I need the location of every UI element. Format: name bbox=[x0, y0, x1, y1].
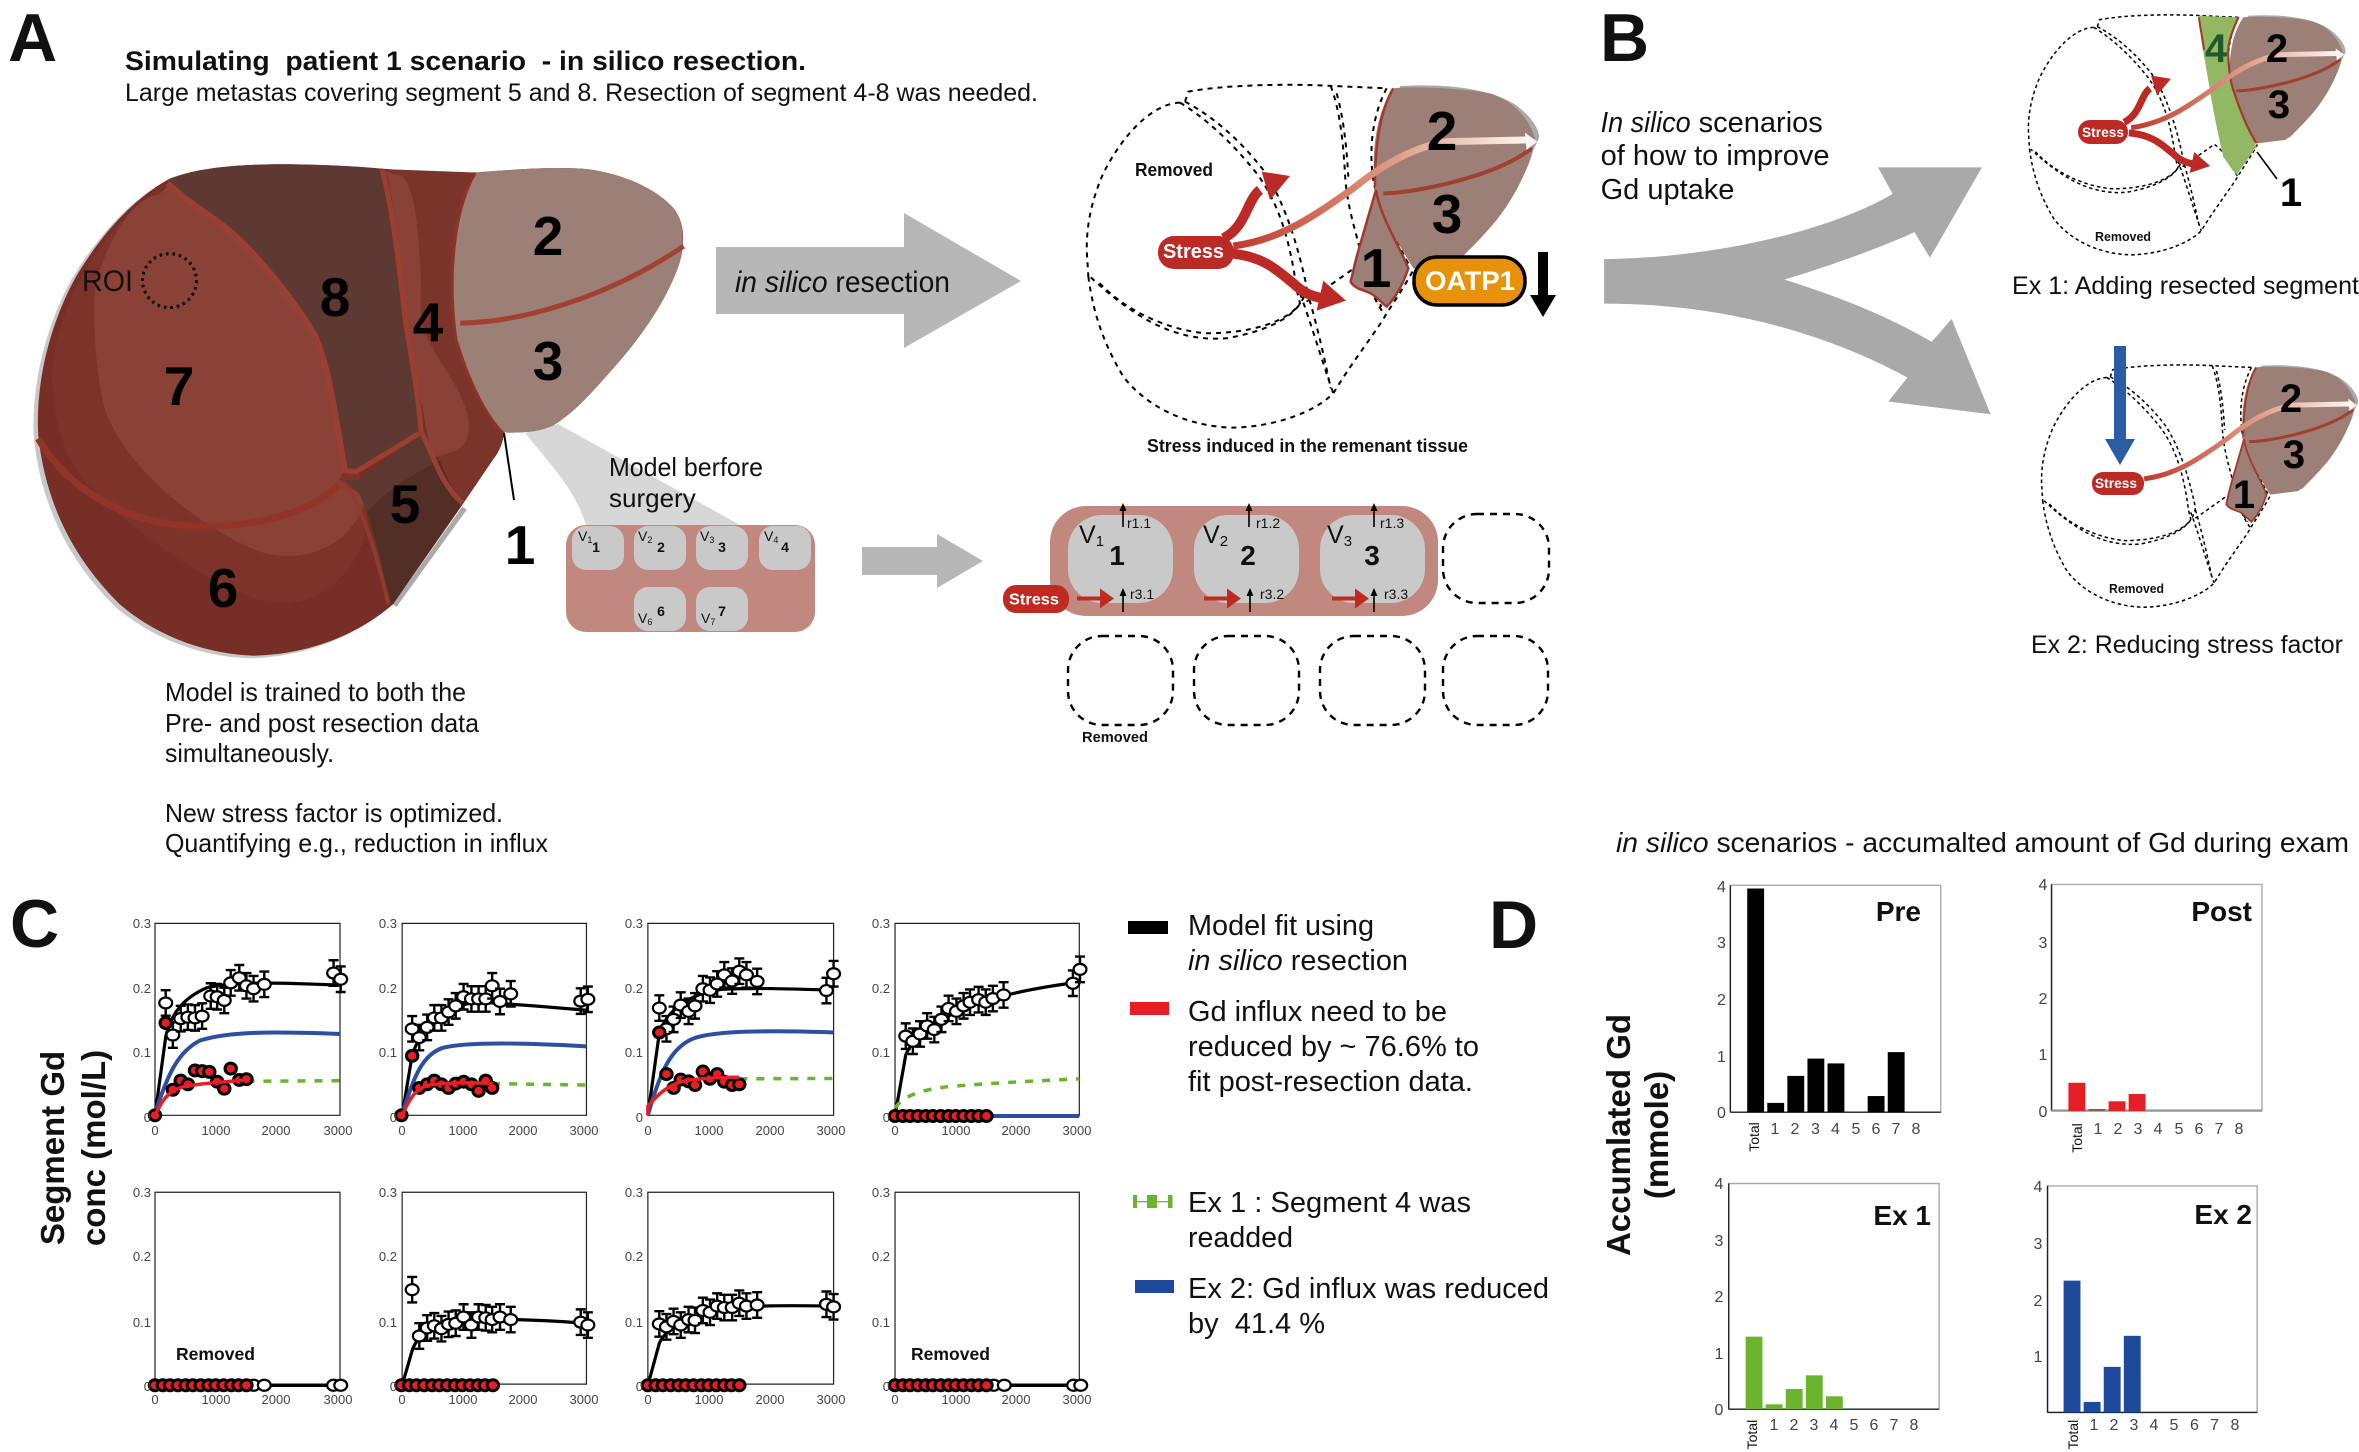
chart tick labels: 0.2 bbox=[872, 1249, 890, 1264]
arrow: in silico resection bbox=[716, 213, 1021, 348]
chart tick labels: 2000 bbox=[509, 1123, 537, 1138]
chart tick labels: 1000 bbox=[449, 1123, 477, 1138]
chart tick labels: 0.3 bbox=[872, 916, 890, 931]
example 2 schematic: Stress bbox=[2095, 475, 2137, 491]
legend: Ex 1: readded bbox=[1188, 1222, 1293, 1254]
chart tick labels: 0 bbox=[636, 1379, 643, 1394]
chart tick labels: 3000 bbox=[817, 1123, 845, 1138]
bar chart: Ex 1: 2 bbox=[1715, 1289, 1724, 1306]
training description text: New stress factor is optimized. bbox=[165, 798, 503, 828]
bar chart: Pre: 5 bbox=[1852, 1121, 1861, 1138]
training description text: Quantifying e.g., reduction in influx bbox=[165, 828, 548, 858]
model before surgery compartments: 7 bbox=[718, 603, 726, 619]
bar chart: Post: 4 bbox=[2154, 1121, 2163, 1138]
post-surgery compartment model: V bbox=[1327, 521, 1344, 549]
bar chart: Ex 2: 3 bbox=[2034, 1236, 2043, 1253]
bar chart: Ex 1: 3 bbox=[1715, 1233, 1724, 1250]
bar chart: Post: Total bbox=[2069, 1123, 2085, 1153]
chart 2 series bbox=[396, 973, 594, 1121]
chart tick labels: 0 bbox=[398, 1123, 406, 1138]
example 2 caption: Ex 2: Reducing stress factor bbox=[2031, 631, 2343, 659]
chart tick labels: 0.2 bbox=[133, 981, 151, 996]
chart 4 series bbox=[889, 957, 1086, 1121]
bar chart: Ex 2: 6 bbox=[2190, 1417, 2199, 1434]
bar chart: Post: 1 bbox=[2094, 1121, 2103, 1138]
panel C label: C bbox=[10, 886, 59, 962]
chart tick labels: 2000 bbox=[1002, 1123, 1030, 1138]
chart tick labels: 0.1 bbox=[625, 1045, 643, 1060]
leader line to segment 1 bbox=[504, 433, 514, 500]
panel B intro text: In silico scenarios bbox=[1601, 107, 1823, 139]
chart 1 series bbox=[149, 960, 347, 1121]
panel B intro text: Gd uptake bbox=[1601, 174, 1734, 206]
bar chart: Post: 2 bbox=[2039, 991, 2048, 1008]
subtitle: Large metastas covering segment 5 and 8. Resection of segment 4-8 was needed. bbox=[125, 79, 1038, 107]
chart tick labels: 3000 bbox=[324, 1392, 352, 1407]
bar chart: Post: 2 bbox=[2114, 1121, 2123, 1138]
chart 8 series bbox=[889, 1380, 1087, 1391]
y axis label D: Accumlated Gd bbox=[1600, 1014, 1637, 1256]
chart tick labels: 1000 bbox=[942, 1123, 970, 1138]
arrow: OATP1 decrease bbox=[1530, 252, 1556, 317]
title: Simulating patient 1 scenario - in silico resection. bbox=[125, 46, 806, 76]
funnel from liver to model box bbox=[525, 424, 740, 525]
chart tick labels: 0.2 bbox=[379, 1249, 397, 1264]
bar chart: Ex 1: 1 bbox=[1770, 1417, 1779, 1434]
bar chart: Pre: 8 bbox=[1912, 1121, 1921, 1138]
bar chart: Post: Post bbox=[2191, 896, 2252, 927]
bar chart: Ex 2: Ex 2 bbox=[2194, 1199, 2252, 1230]
chart tick labels: 0.3 bbox=[625, 916, 643, 931]
chart tick labels: 0 bbox=[390, 1379, 397, 1394]
bar chart: Pre bbox=[1717, 879, 1941, 1152]
training description text: Pre- and post resection data bbox=[165, 708, 480, 738]
post-surgery compartment model: 2 bbox=[1220, 533, 1228, 550]
example 2 schematic: 3 bbox=[2283, 433, 2305, 477]
bar chart: Post: 5 bbox=[2175, 1121, 2184, 1138]
chart tick labels: 3000 bbox=[570, 1392, 598, 1407]
chart tick labels: 0.3 bbox=[133, 916, 151, 931]
bar chart: Pre: 4 bbox=[1831, 1121, 1840, 1138]
model before surgery compartments: 3 bbox=[718, 539, 726, 555]
legend: Ex 2: by 41.4 % bbox=[1188, 1308, 1325, 1340]
chart tick labels: 0.2 bbox=[379, 981, 397, 996]
bar chart: Ex 2: 8 bbox=[2231, 1417, 2240, 1434]
stress schematic after resection: 3 bbox=[1432, 183, 1462, 245]
bar chart: Ex 1: 5 bbox=[1850, 1417, 1859, 1434]
removed labels: Removed bbox=[911, 1344, 990, 1364]
model before surgery compartments: 6 bbox=[657, 603, 665, 619]
bar chart: Ex 2: 2 bbox=[2110, 1417, 2119, 1434]
bar chart: Ex 2 bbox=[2034, 1179, 2257, 1449]
bar chart: Post bbox=[2039, 877, 2262, 1153]
stress schematic after resection: 1 bbox=[1361, 237, 1391, 299]
model before surgery compartments bbox=[566, 525, 815, 632]
chart tick labels: 0 bbox=[644, 1392, 652, 1407]
chart tick labels: 0 bbox=[390, 1110, 397, 1125]
model before surgery label: Model berfore bbox=[609, 452, 763, 482]
bar chart: Ex 1: Ex 1 bbox=[1873, 1200, 1931, 1231]
chart tick labels: 0.1 bbox=[872, 1045, 890, 1060]
arrow to post-surgery model bbox=[862, 534, 983, 588]
bar chart: Ex 1: 0 bbox=[1715, 1402, 1724, 1419]
chart tick labels: 0.2 bbox=[625, 981, 643, 996]
training description text: simultaneously. bbox=[165, 738, 334, 768]
panel A label: A bbox=[8, 0, 57, 76]
example 1 schematic: 3 bbox=[2268, 83, 2290, 127]
bar chart: Ex 2: 2 bbox=[2034, 1293, 2043, 1310]
chart tick labels: 0 bbox=[636, 1110, 643, 1125]
post-surgery compartment model: V bbox=[1079, 521, 1096, 549]
bar chart: Ex 1 bbox=[1715, 1176, 1939, 1449]
ROI label and dotted circle: ROI bbox=[82, 265, 133, 298]
y axis label C: Segment Gd bbox=[34, 1051, 71, 1245]
chart tick labels: 0 bbox=[144, 1110, 151, 1125]
chart 6 series bbox=[396, 1277, 594, 1391]
post-surgery compartment model: 1 bbox=[1096, 533, 1104, 550]
bar chart: Post: 3 bbox=[2134, 1121, 2143, 1138]
post-surgery compartment model: r1.2 bbox=[1256, 515, 1280, 531]
chart tick labels: 0.3 bbox=[379, 916, 397, 931]
model before surgery compartments: 1 bbox=[592, 539, 600, 555]
chart tick labels: 0 bbox=[891, 1123, 899, 1138]
example 1 schematic: 2 bbox=[2266, 27, 2288, 71]
chart tick labels: 3000 bbox=[570, 1123, 598, 1138]
post-surgery compartment model: Removed bbox=[1082, 729, 1148, 746]
y axis label D: (mmole) bbox=[1638, 1071, 1675, 1199]
model before surgery compartments: 4 bbox=[781, 539, 789, 555]
example 1 schematic: 4 bbox=[2205, 27, 2228, 71]
liver segment numbers: 5 bbox=[390, 473, 420, 535]
model before surgery compartments: V bbox=[578, 528, 587, 544]
bar chart: Ex 2: Total bbox=[2065, 1420, 2081, 1449]
bar chart: Pre: 4 bbox=[1717, 879, 1726, 896]
panel B label: B bbox=[1600, 0, 1649, 76]
ROI label and dotted circle bbox=[82, 254, 196, 308]
post-surgery compartment model: 2 bbox=[1240, 540, 1256, 571]
bar chart: Ex 1: 8 bbox=[1910, 1417, 1919, 1434]
chart tick labels: 0 bbox=[398, 1392, 406, 1407]
training description text: Model is trained to both the bbox=[165, 677, 466, 707]
chart tick labels: 0.3 bbox=[379, 1185, 397, 1200]
stress schematic after resection: Removed bbox=[1135, 160, 1213, 180]
chart tick labels: 3000 bbox=[324, 1123, 352, 1138]
example 1 schematic: 1 bbox=[2280, 171, 2302, 215]
chart tick labels: 1000 bbox=[942, 1392, 970, 1407]
liver segment numbers: 6 bbox=[208, 557, 238, 619]
chart tick labels: 0 bbox=[891, 1392, 899, 1407]
panel D header: in silico scenarios - accumalted amount of Gd during exam bbox=[1616, 827, 2349, 858]
legend: influx reduction bbox=[1130, 996, 1479, 1098]
chart tick labels: 2000 bbox=[262, 1392, 290, 1407]
stress schematic after resection: 2 bbox=[1427, 100, 1457, 162]
model before surgery compartments: 7 bbox=[710, 617, 715, 627]
legend bbox=[1128, 910, 1549, 1340]
example 2 schematic: 2 bbox=[2280, 377, 2302, 421]
chart tick labels: 2000 bbox=[509, 1392, 537, 1407]
OATP1 badge bbox=[1414, 257, 1525, 305]
chart tick labels: 2000 bbox=[756, 1123, 784, 1138]
bar chart: Ex 1: 7 bbox=[1890, 1417, 1899, 1434]
chart tick labels: 0.1 bbox=[872, 1315, 890, 1330]
post-surgery compartment model: r3.3 bbox=[1384, 586, 1408, 602]
chart tick labels: 1000 bbox=[202, 1123, 230, 1138]
bar chart: Ex 1: 6 bbox=[1870, 1417, 1879, 1434]
chart tick labels: 0 bbox=[151, 1392, 159, 1407]
chart tick labels bbox=[133, 916, 1091, 1407]
chart tick labels: 0.3 bbox=[625, 1185, 643, 1200]
legend: Ex 2 bbox=[1135, 1273, 1549, 1340]
chart tick labels: 1000 bbox=[449, 1392, 477, 1407]
chart tick labels: 3000 bbox=[1063, 1392, 1091, 1407]
bar chart: Pre: 3 bbox=[1811, 1121, 1820, 1138]
chart tick labels: 1000 bbox=[695, 1123, 723, 1138]
bar chart: Post: 3 bbox=[2039, 935, 2048, 952]
chart tick labels: 2000 bbox=[262, 1123, 290, 1138]
bar chart: Ex 1: 3 bbox=[1810, 1417, 1819, 1434]
post-surgery compartment model: 3 bbox=[1364, 540, 1380, 571]
legend: model fit bbox=[1128, 910, 1408, 977]
bar chart: Pre: 0 bbox=[1717, 1105, 1726, 1122]
legend: influx reduction: fit post-resection data. bbox=[1188, 1066, 1473, 1098]
model before surgery compartments: 2 bbox=[647, 535, 652, 545]
chart frames bbox=[155, 923, 1079, 1384]
bar chart: Pre: 1 bbox=[1771, 1121, 1780, 1138]
bar chart: Post: 1 bbox=[2039, 1047, 2048, 1064]
liver segment numbers: 7 bbox=[164, 355, 194, 417]
legend: model fit: in silico resection bbox=[1188, 945, 1408, 977]
example 2 schematic: 1 bbox=[2233, 473, 2255, 517]
example 1 caption: Ex 1: Adding resected segment bbox=[2012, 272, 2359, 300]
bar chart: Ex 2: 1 bbox=[2034, 1349, 2043, 1366]
chart tick labels: 0 bbox=[883, 1110, 890, 1125]
example 2 schematic bbox=[2042, 365, 2358, 607]
model before surgery label: surgery bbox=[609, 483, 696, 513]
post-surgery compartment model: r3.1 bbox=[1130, 586, 1154, 602]
bar chart: Post: 0 bbox=[2039, 1104, 2048, 1121]
bar chart: Post: 7 bbox=[2215, 1121, 2224, 1138]
chart 3 series bbox=[648, 958, 840, 1115]
model before surgery compartments: V bbox=[701, 610, 710, 626]
chart 7 series bbox=[642, 1290, 840, 1391]
chart tick labels: 0.1 bbox=[379, 1045, 397, 1060]
example 1 schematic: Removed bbox=[2095, 230, 2151, 244]
post-surgery compartment model: r3.2 bbox=[1260, 586, 1284, 602]
chart tick labels: 0 bbox=[644, 1123, 652, 1138]
removed labels bbox=[176, 1344, 990, 1364]
panel B intro text: of how to improve bbox=[1601, 140, 1829, 172]
bar chart: Pre: Pre bbox=[1876, 896, 1921, 927]
bar chart: Pre: 6 bbox=[1872, 1121, 1881, 1138]
liver illustration bbox=[33, 164, 684, 658]
OATP1 badge: OATP1 bbox=[1425, 266, 1515, 296]
bar chart: Ex 1: 2 bbox=[1790, 1417, 1799, 1434]
chart tick labels: 0.3 bbox=[872, 1185, 890, 1200]
chart tick labels: 3000 bbox=[1063, 1123, 1091, 1138]
chart tick labels: 3000 bbox=[817, 1392, 845, 1407]
bar chart: Post: 8 bbox=[2235, 1121, 2244, 1138]
chart tick labels: 0.1 bbox=[133, 1315, 151, 1330]
model before surgery compartments: 1 bbox=[587, 535, 592, 545]
bar chart: Ex 2: 1 bbox=[2090, 1417, 2099, 1434]
post-surgery compartment model bbox=[1003, 503, 1549, 746]
model before surgery compartments: V bbox=[700, 528, 709, 544]
liver segment numbers: 2 bbox=[533, 205, 563, 267]
stress schematic after resection bbox=[1087, 85, 1539, 456]
bar chart: Pre: Total bbox=[1746, 1122, 1762, 1152]
model before surgery compartments: V bbox=[764, 528, 773, 544]
chart tick labels: 0.2 bbox=[133, 1249, 151, 1264]
example 1 schematic: Stress bbox=[2082, 124, 2124, 140]
chart tick labels: 1000 bbox=[202, 1392, 230, 1407]
splitting arrow bbox=[1604, 167, 1991, 414]
bar chart: Post: 6 bbox=[2195, 1121, 2204, 1138]
bar chart: Ex 2: 4 bbox=[2034, 1179, 2043, 1196]
y axis label C: conc (mol/L) bbox=[75, 1050, 112, 1246]
bar chart: Ex 2: 3 bbox=[2130, 1417, 2139, 1434]
panel D label: D bbox=[1489, 887, 1538, 963]
legend: Ex 1 bbox=[1133, 1187, 1471, 1254]
chart tick labels: 0.2 bbox=[872, 981, 890, 996]
post-surgery compartment model: 1 bbox=[1109, 540, 1125, 571]
bar chart: Pre: 7 bbox=[1892, 1121, 1901, 1138]
liver segment numbers: 8 bbox=[320, 266, 350, 328]
chart tick labels: 2000 bbox=[756, 1392, 784, 1407]
bar chart: Pre: 2 bbox=[1717, 992, 1726, 1009]
chart tick labels: 0.1 bbox=[133, 1045, 151, 1060]
model before surgery compartments: 3 bbox=[709, 535, 714, 545]
liver segment numbers bbox=[164, 205, 563, 619]
bar chart: Pre: 2 bbox=[1791, 1121, 1800, 1138]
liver segment numbers: 4 bbox=[413, 291, 444, 353]
arrow: reduced stress bbox=[2105, 346, 2135, 465]
legend: influx reduction: Gd influx need to be bbox=[1188, 996, 1447, 1028]
chart tick labels: 2000 bbox=[1002, 1392, 1030, 1407]
model before surgery compartments: V bbox=[638, 610, 647, 626]
bar chart: Ex 1: 4 bbox=[1715, 1176, 1724, 1193]
model before surgery compartments: 4 bbox=[773, 535, 778, 545]
panel C charts bbox=[133, 916, 1091, 1407]
bar chart: Post: 4 bbox=[2039, 877, 2048, 894]
liver segment numbers: 3 bbox=[533, 330, 563, 392]
removed labels: Removed bbox=[176, 1344, 255, 1364]
legend: model fit: Model fit using bbox=[1188, 910, 1374, 942]
bar chart: Ex 1: 1 bbox=[1715, 1346, 1724, 1363]
model before surgery compartments: 6 bbox=[647, 617, 652, 627]
bar chart: Ex 2: 4 bbox=[2150, 1417, 2159, 1434]
chart tick labels: 0.1 bbox=[625, 1315, 643, 1330]
model before surgery compartments: 2 bbox=[657, 539, 665, 555]
bar chart: Pre: 1 bbox=[1717, 1049, 1726, 1066]
bar chart: Ex 1: 4 bbox=[1830, 1417, 1839, 1434]
model before surgery compartments: V bbox=[638, 528, 647, 544]
liver segment numbers: 1 bbox=[505, 514, 535, 576]
chart tick labels: 0.3 bbox=[133, 1185, 151, 1200]
bar chart: Ex 2: 5 bbox=[2170, 1417, 2179, 1434]
chart tick labels: 0 bbox=[151, 1123, 159, 1138]
post-surgery compartment model: r1.3 bbox=[1380, 515, 1404, 531]
post-surgery compartment model: 3 bbox=[1344, 533, 1352, 550]
bar chart: Pre: 3 bbox=[1717, 935, 1726, 952]
chart 5 series bbox=[149, 1380, 347, 1391]
bar chart: Ex 2: 7 bbox=[2210, 1417, 2219, 1434]
example 2 schematic: Removed bbox=[2109, 582, 2164, 596]
post-surgery compartment model: V bbox=[1203, 521, 1220, 549]
legend: influx reduction: reduced by ~ 76.6% to bbox=[1188, 1031, 1479, 1063]
chart tick labels: 0 bbox=[144, 1379, 151, 1394]
example 1 schematic bbox=[2028, 15, 2345, 255]
chart tick labels: 1000 bbox=[695, 1392, 723, 1407]
chart tick labels: 0 bbox=[883, 1379, 890, 1394]
stress schematic after resection: Stress induced in the remenant tissue bbox=[1147, 436, 1468, 456]
chart tick labels: 0.2 bbox=[625, 1249, 643, 1264]
chart tick labels: 0.1 bbox=[379, 1315, 397, 1330]
post-surgery compartment model: r1.1 bbox=[1127, 515, 1151, 531]
legend: Ex 2: Ex 2: Gd influx was reduced bbox=[1188, 1273, 1549, 1305]
arrow: in silico resection: in silico resection bbox=[735, 266, 950, 299]
stress schematic after resection: Stress bbox=[1163, 241, 1224, 263]
post-surgery compartment model: Stress bbox=[1009, 592, 1059, 608]
bar chart: Ex 1: Total bbox=[1744, 1420, 1760, 1449]
legend: Ex 1: Ex 1 : Segment 4 was bbox=[1188, 1187, 1471, 1219]
